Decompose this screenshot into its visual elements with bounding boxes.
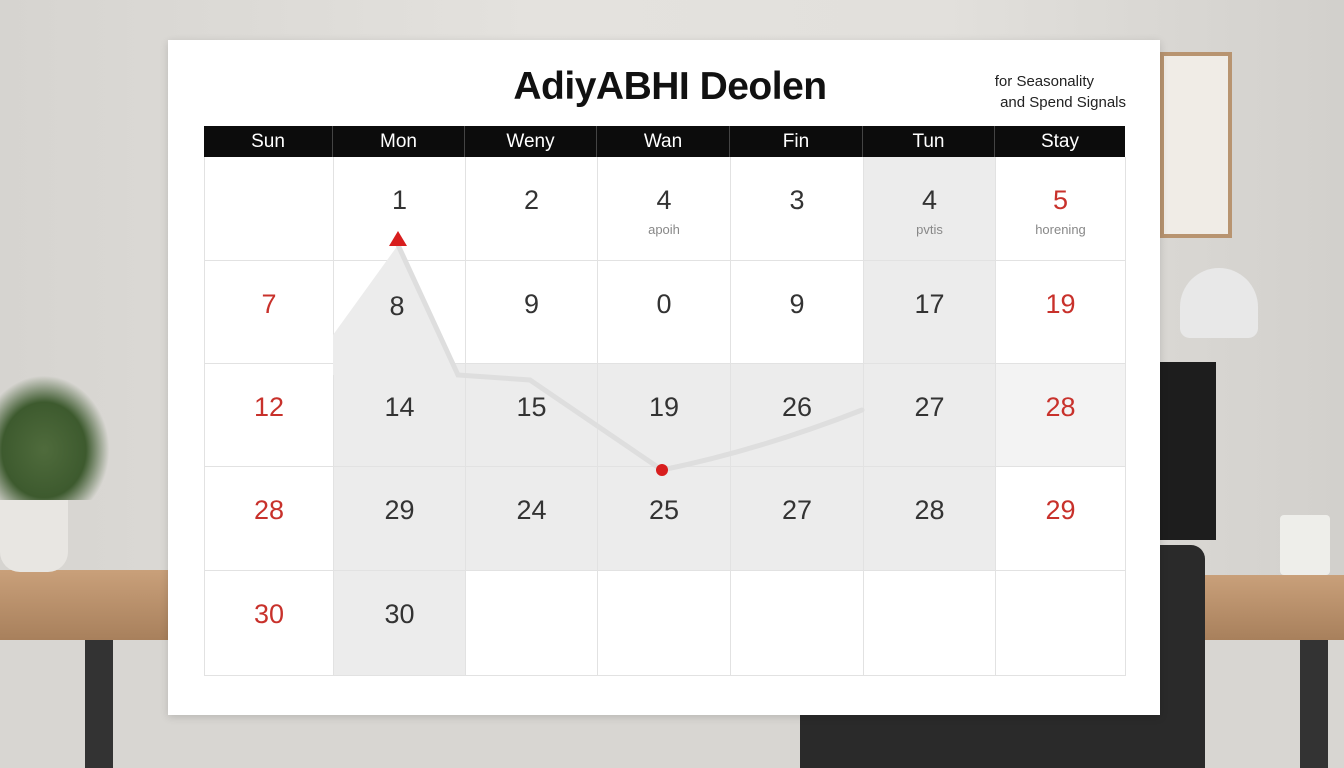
- row 1: [205, 157, 334, 261]
- calendar grid: 9: [789, 289, 805, 319]
- calendar grid: 4: [656, 185, 672, 215]
- calendar grid: 4: [922, 185, 937, 215]
- calendar grid: 25: [649, 495, 679, 525]
- marker: low dot: [656, 464, 668, 476]
- shaded area under line: [333, 245, 458, 375]
- calendar grid: 28: [1045, 392, 1076, 422]
- subtitle: [994, 73, 1126, 111]
- calendar grid: apoih: [648, 222, 680, 237]
- calendar grid: 0: [656, 289, 672, 319]
- calendar grid: 29: [1045, 495, 1076, 525]
- calendar grid: 29: [384, 495, 415, 525]
- calendar grid: 19: [649, 392, 679, 422]
- calendar grid: 27: [914, 392, 945, 422]
- background: lamp: [1180, 268, 1258, 338]
- calendar grid: 30: [384, 599, 415, 629]
- row 3: [205, 364, 334, 467]
- row 5: 30: [254, 599, 284, 629]
- calendar grid: 17: [914, 289, 945, 319]
- row 5: [205, 571, 334, 676]
- calendar grid: 19: [1045, 289, 1076, 319]
- row 4: 28: [254, 495, 284, 525]
- background: chair: [800, 545, 1205, 768]
- calendar grid: horening: [1035, 222, 1086, 237]
- header row: [204, 126, 1125, 157]
- subtitle: and Spend Signals: [1000, 94, 1126, 111]
- title: AdiyABHI Deolen: [513, 65, 827, 108]
- calendar grid: 28: [914, 495, 945, 525]
- text: Mon: [380, 131, 417, 152]
- text: Wan: [644, 131, 682, 152]
- cell number 8: 8: [389, 291, 405, 321]
- calendar grid: 2: [524, 185, 539, 215]
- background: plant leaves: [0, 375, 110, 500]
- calendar grid: pvtis: [916, 222, 943, 237]
- background: plant pot: [0, 500, 68, 572]
- text: Stay: [1041, 131, 1079, 152]
- calendar grid: 27: [782, 495, 812, 525]
- text: Sun: [251, 131, 285, 152]
- calendar grid: 1: [392, 185, 407, 215]
- background: desk left: [0, 570, 170, 640]
- text: Tun: [912, 131, 945, 152]
- row 2: [205, 261, 334, 364]
- calendar card: [168, 40, 1160, 715]
- background: desk right: [1160, 575, 1344, 640]
- row 4: [205, 467, 334, 571]
- calendar grid: 5: [1053, 185, 1068, 215]
- subtitle: for Seasonality: [995, 73, 1094, 90]
- calendar grid: [204, 157, 1125, 676]
- marker: peak triangle: [389, 231, 407, 246]
- trend line: [389, 231, 862, 476]
- text: Fin: [783, 131, 809, 152]
- calendar grid: 14: [384, 392, 415, 422]
- calendar grid: 3: [789, 185, 805, 215]
- background: picture frame: [1160, 52, 1232, 238]
- background: cup: [1280, 515, 1330, 575]
- background: monitor: [1160, 362, 1216, 540]
- calendar grid: 26: [782, 392, 812, 422]
- row 3: 12: [254, 392, 284, 422]
- calendar grid: 15: [516, 392, 547, 422]
- calendar grid: 24: [516, 495, 547, 525]
- row 2: 7: [261, 289, 277, 319]
- calendar grid: 9: [524, 289, 539, 319]
- text: Weny: [506, 131, 555, 152]
